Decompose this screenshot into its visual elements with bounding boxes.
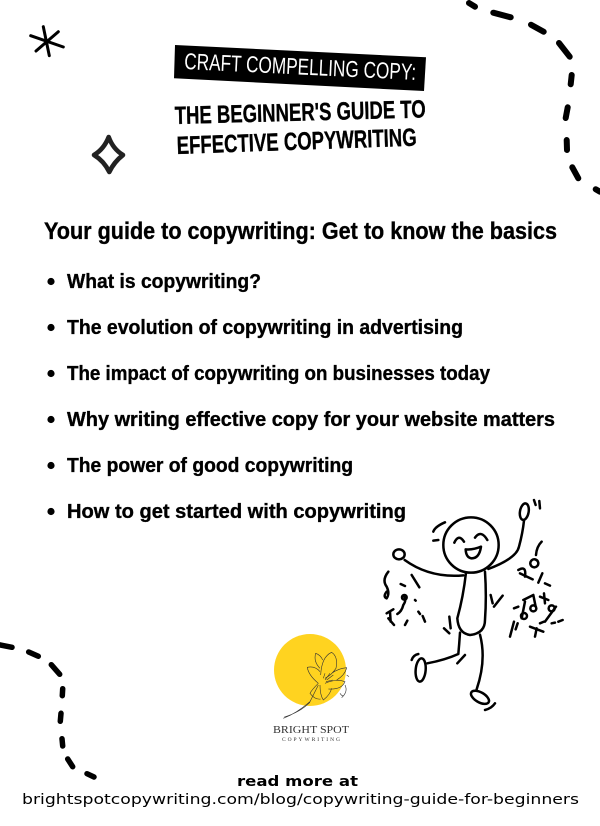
icon: asterisk	[31, 27, 63, 56]
logo wordmark: BRIGHT SPOT	[273, 725, 350, 736]
footer call to action: brightspotcopywriting.com/blog/copywriting-guide-for-beginners	[22, 792, 579, 808]
bullet list: The power of good copywriting	[67, 455, 353, 477]
title banner: CRAFT COMPELLING COPY:	[184, 48, 417, 85]
bullet list	[47, 271, 555, 523]
motion marks	[412, 500, 540, 710]
decoration: top right dashed curve	[469, 3, 600, 192]
heading: Your guide to copywriting: Get to know the basics	[44, 218, 557, 245]
logo: Bright Spot Copywriting: COPYWRITING	[282, 737, 340, 743]
bullet list: How to get started with copywriting	[67, 501, 406, 523]
subtitle	[174, 95, 426, 160]
title banner	[174, 45, 426, 91]
figure body and limbs	[393, 503, 530, 707]
logo sun circle	[274, 634, 346, 706]
bullet list: The evolution of copywriting in advertising	[67, 317, 463, 339]
bullet list: Why writing effective copy for your website matters	[67, 409, 555, 431]
logo: Bright Spot Copywriting	[273, 634, 350, 743]
music notes right	[510, 542, 563, 637]
music notes left	[385, 572, 425, 625]
bullet list: What is copywriting?	[67, 271, 261, 293]
icon: four-point sparkle	[94, 137, 123, 172]
logo flower line drawing	[283, 652, 349, 718]
subtitle: EFFECTIVE COPYWRITING	[176, 124, 417, 160]
illustration: dancing stick figure with music notes	[385, 500, 563, 710]
figure head and face	[443, 517, 499, 573]
footer call to action	[22, 774, 579, 808]
bullet list: The impact of copywriting on businesses today	[67, 363, 491, 385]
decoration: bottom left dashed curve	[0, 644, 94, 777]
subtitle: THE BEGINNER'S GUIDE TO	[174, 95, 426, 130]
footer call to action: read more at	[237, 774, 358, 790]
